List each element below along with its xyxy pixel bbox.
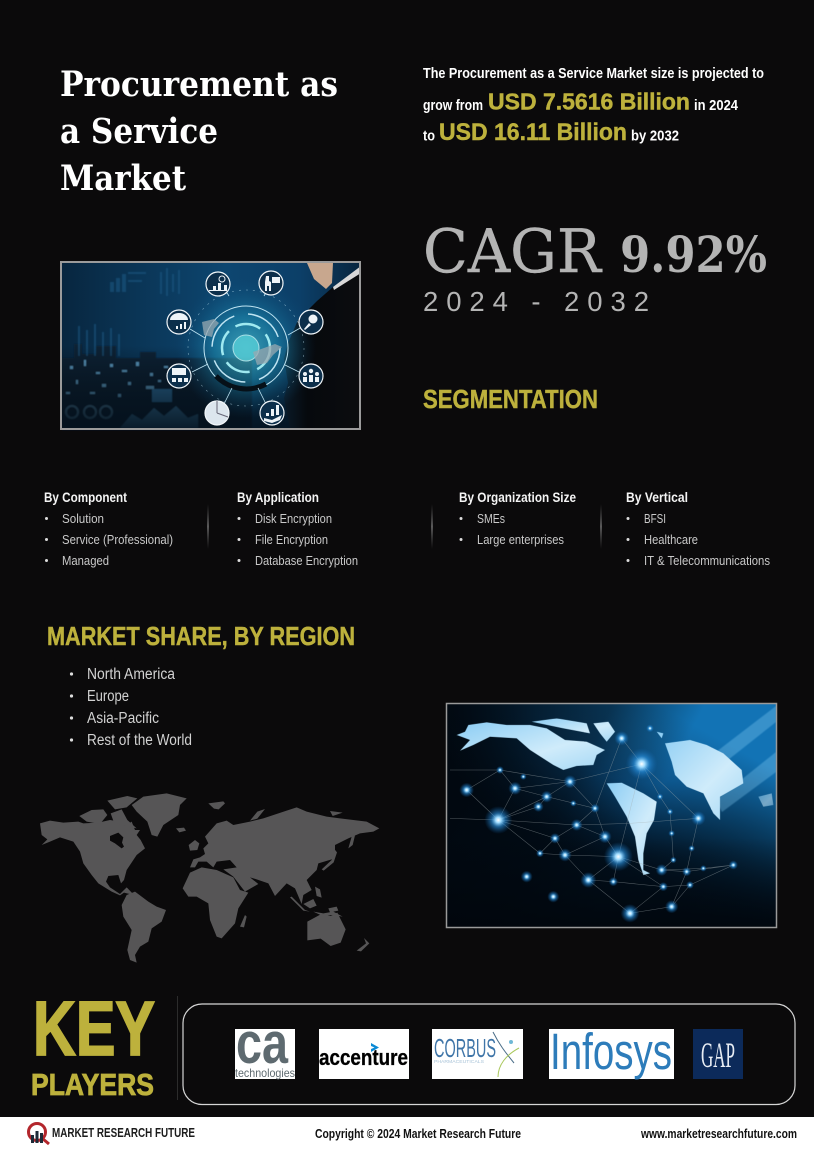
market share heading: MARKET SHARE, BY REGION <box>47 621 355 651</box>
segment: by application: Database Encryption <box>255 554 358 568</box>
region list: Asia-Pacific <box>87 710 159 727</box>
logo: market research future <box>28 1124 195 1144</box>
logo: accenture <box>319 1029 409 1079</box>
segment: by component: Solution <box>62 512 104 526</box>
segment: by application: Disk Encryption <box>255 512 332 526</box>
region list: Rest of the World <box>87 732 192 749</box>
image frame <box>446 704 776 928</box>
key players heading: PLAYERS <box>31 1067 154 1102</box>
region list: North America <box>87 666 175 683</box>
japan <box>322 835 355 871</box>
logo: gap: GAP <box>701 1035 735 1075</box>
market size statement: USD 16.11 Billion <box>439 119 627 146</box>
segmentation heading: SEGMENTATION <box>423 384 598 414</box>
title <box>60 64 338 199</box>
image: business analytics hologram <box>61 262 361 430</box>
key players heading: KEY <box>33 986 155 1072</box>
north america <box>40 820 145 895</box>
market size statement <box>423 65 764 146</box>
segment: by vertical <box>626 489 770 568</box>
region list <box>70 666 192 749</box>
market size statement: grow from <box>423 97 483 114</box>
CAGR figure: CAGR <box>423 217 603 287</box>
image frame <box>61 262 360 429</box>
region list: Europe <box>87 688 129 705</box>
arctic islands <box>79 796 343 828</box>
logo: ca technologies: ca <box>236 1011 289 1076</box>
logo: ca technologies: technologies <box>235 1066 295 1080</box>
image: global network map <box>446 704 776 928</box>
segment: by vertical: By Vertical <box>626 489 688 505</box>
segment: by organization size <box>459 489 576 547</box>
segment: by component: Managed <box>62 554 109 568</box>
segment: by component <box>44 489 173 568</box>
australia <box>307 913 346 946</box>
logo: infosys: Infosys <box>550 1023 672 1080</box>
segment: by component: By Component <box>44 489 127 505</box>
iceland <box>176 828 186 832</box>
key players panel <box>183 1004 795 1104</box>
logo: corbus <box>432 1029 523 1079</box>
segment: by vertical: BFSI <box>644 512 666 526</box>
CAGR figure <box>423 217 767 317</box>
segment: by application: File Encryption <box>255 533 328 547</box>
hands <box>202 319 282 365</box>
world map <box>40 793 379 963</box>
segment: by application <box>237 489 358 568</box>
title: a Service <box>60 111 218 152</box>
segment: by vertical: Healthcare <box>644 533 698 547</box>
network lines <box>450 738 733 913</box>
logo: corbus: PHARMACEUTICALS <box>434 1059 484 1064</box>
hologram rings <box>176 278 316 418</box>
new zealand <box>357 938 369 951</box>
british isles <box>189 840 199 851</box>
eurasia <box>190 807 379 904</box>
footer bar <box>0 1117 814 1150</box>
title: Market <box>60 158 186 199</box>
businessman <box>284 263 361 428</box>
CAGR figure: 2024 - 2032 <box>423 286 649 317</box>
icon glyphs <box>170 276 319 423</box>
logo: market research future: MARKET RESEARCH FUTURE <box>52 1125 195 1140</box>
CAGR figure: 9.92% <box>620 225 767 284</box>
segment: by vertical: IT & Telecommunications <box>644 554 770 568</box>
city skyline <box>62 344 252 430</box>
svalbard <box>208 801 225 809</box>
key players heading <box>31 986 155 1102</box>
segment: by application: By Application <box>237 489 319 505</box>
greenland <box>132 793 187 837</box>
market size statement: in 2024 <box>694 97 739 114</box>
africa <box>183 867 248 938</box>
segment: by component: Service (Professional) <box>62 533 173 547</box>
logo: gap <box>693 1029 743 1079</box>
madagascar <box>240 915 247 927</box>
market size statement: by 2032 <box>631 128 679 144</box>
market size statement: to <box>423 128 435 144</box>
logo: corbus: CORBUS <box>434 1033 496 1063</box>
beam streaks <box>716 706 776 812</box>
segment: by organization size: Large enterprises <box>477 533 564 547</box>
segment: by organization size: SMEs <box>477 512 505 526</box>
continents <box>457 718 773 875</box>
icon circles <box>167 271 323 425</box>
southeast asia islands <box>290 887 343 917</box>
title: Procurement as <box>60 64 338 105</box>
copyright: Copyright © 2024 Market Research Future <box>315 1126 521 1141</box>
logo: accenture: accenture <box>319 1045 408 1070</box>
market size statement: USD 7.5616 Billion <box>488 88 690 114</box>
south america <box>122 892 166 963</box>
segment: by organization size: By Organization Size <box>459 489 576 505</box>
faint chart overlays <box>78 268 180 356</box>
network nodes <box>459 724 738 923</box>
